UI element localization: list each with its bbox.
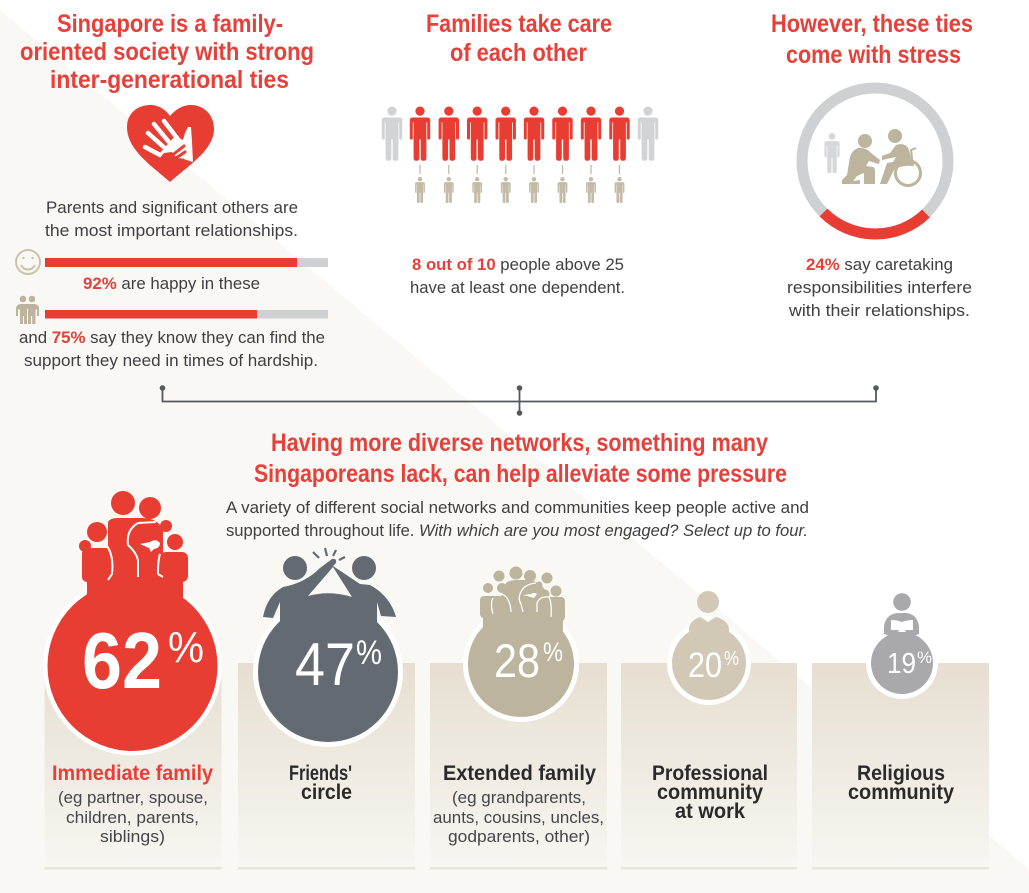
heading: family-oriented society: inter-generational ties: [50, 66, 289, 94]
circle: extended family 28 percent: 28: [494, 634, 540, 687]
connector bracket: [160, 385, 879, 416]
text: 92 percent: 92% are happy in these: [83, 275, 260, 293]
text: 75 percent: and 75% say they know they can find the: [19, 329, 325, 347]
circle: friends circle 47 percent: 47: [295, 631, 355, 698]
label: professional community: community: [657, 781, 763, 804]
label: friends circle: circle: [301, 781, 352, 804]
label: extended family: (eg grandparents,: [452, 788, 586, 807]
label: professional community: at work: [675, 800, 745, 823]
label: extended family: [433, 762, 604, 846]
heading: ties come with stress: [771, 10, 973, 69]
text: 24 percent: with their relationships.: [788, 302, 970, 320]
text: 8 out of 10: [410, 256, 625, 297]
circle: friends circle 47 percent: [253, 548, 403, 747]
icon: smiley: [16, 250, 40, 274]
label: religious community: Religious: [857, 762, 945, 785]
circle: extended family 28 percent: [463, 566, 579, 722]
label: immediate family: (eg partner, spouse,: [58, 788, 208, 807]
circle: immediate family 62 percent: %: [168, 623, 204, 672]
heading: ties come with stress: come with stress: [786, 41, 961, 69]
heading: diverse networks: [254, 429, 787, 488]
heading: diverse networks: Having more diverse networks, something many: [271, 429, 768, 457]
heading: families take care: of each other: [450, 39, 587, 67]
text: important relationships: Parents and significant others are: [46, 199, 298, 217]
text: intro to networks: [226, 499, 809, 540]
icon: heart with hands: [127, 105, 214, 182]
heading: diverse networks: Singaporeans lack, can help alleviate some pressure: [254, 460, 787, 488]
text: 75 percent: [19, 329, 325, 370]
pictogram: 8 of 10 with dependents: [382, 106, 658, 203]
heading: ties come with stress: However, these ties: [771, 10, 973, 38]
ring chart: 24 percent with caretaking icon: [802, 88, 948, 234]
label: immediate family: Immediate family: [52, 762, 213, 785]
text: 8 out of 10: have at least one dependent.: [410, 279, 625, 297]
circle: friends circle 47 percent: %: [356, 634, 382, 672]
label: friends circle: [289, 762, 352, 804]
text: intro to networks: supported throughout life. With which are you most engaged? Select up to four.: [226, 522, 808, 540]
heading: family-oriented society: Singapore is a family-: [57, 10, 283, 38]
text: 24 percent: 24% say caretaking: [806, 256, 953, 274]
text: 8 out of 10: 8 out of 10 people above 25: [412, 256, 624, 274]
text: 75 percent: support they need in times of hardship.: [24, 352, 318, 370]
label: immediate family: children, parents,: [66, 808, 199, 827]
label: friends circle: Friends': [289, 762, 352, 785]
label: extended family: aunts, cousins, uncles,: [433, 808, 604, 827]
heading: families take care: [426, 10, 612, 67]
text: 24 percent: [787, 256, 972, 320]
bar: 75 percent support: [45, 310, 328, 318]
circle: professional community 20 percent: %: [724, 648, 739, 670]
text: intro to networks: A variety of different social networks and communities keep people active and: [226, 499, 809, 517]
text: important relationships: the most important relationships.: [45, 222, 298, 240]
circle: immediate family 62 percent: 62: [82, 616, 162, 705]
label: professional community: [652, 762, 768, 823]
heading: family-oriented society: [20, 10, 314, 94]
label: immediate family: siblings): [100, 827, 165, 846]
label: religious community: community: [848, 781, 954, 804]
label: religious community: [848, 762, 954, 804]
bar: 92 percent happy: [45, 258, 328, 267]
text: 24 percent: responsibilities interfere: [787, 279, 972, 297]
label: immediate family: [52, 762, 213, 846]
heading: family-oriented society: oriented society with strong: [20, 38, 314, 66]
circle: religious community 19 percent: [866, 593, 938, 699]
icon: two friends: [16, 296, 39, 324]
circle: immediate family 62 percent: [43, 491, 222, 756]
circle: religious community 19 percent: 19: [887, 648, 916, 680]
label: professional community: Professional: [652, 762, 768, 785]
circle: professional community 20 percent: 20: [688, 646, 722, 685]
heading: families take care: Families take care: [426, 10, 612, 38]
label: extended family: Extended family: [443, 762, 596, 785]
circle: extended family 28 percent: %: [543, 637, 563, 667]
label: extended family: godparents, other): [448, 827, 590, 846]
text: important relationships: [45, 199, 298, 240]
panel backgrounds: [44, 663, 989, 867]
panel base lines: [44, 867, 989, 870]
circle: professional community 20 percent: [667, 591, 751, 705]
circle: religious community 19 percent: %: [917, 648, 932, 667]
